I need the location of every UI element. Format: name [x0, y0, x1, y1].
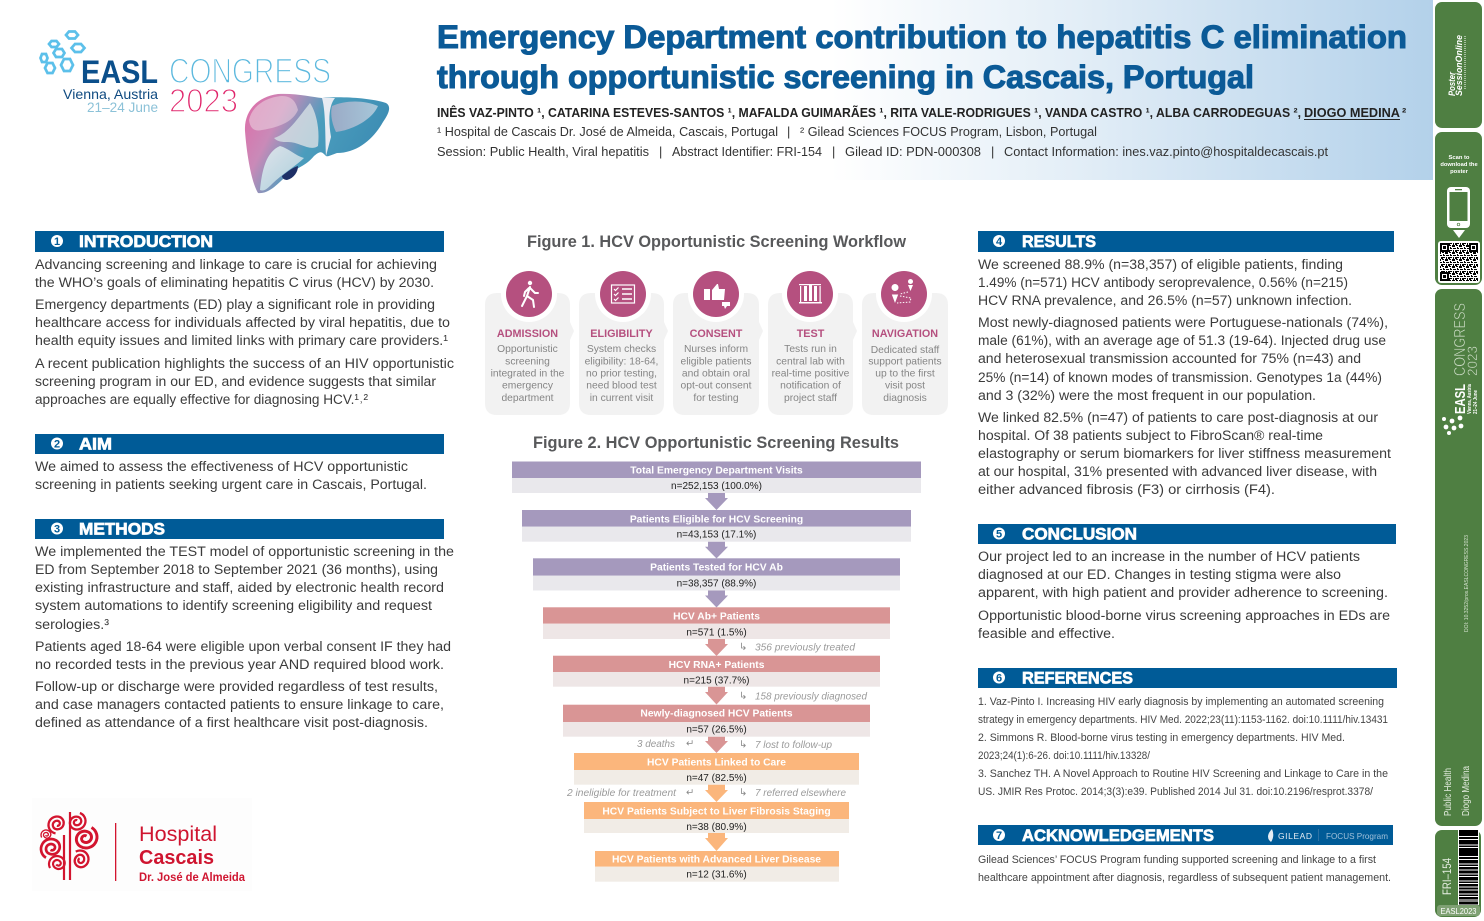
text: introduction body: Emergency departments (ED) play a significant role in providing	[35, 297, 435, 313]
session information: Abstract Identifier: FRI-154	[672, 144, 822, 159]
affiliations: ¹ Hospital de Cascais Dr. José de Almeida, Cascais, Portugal	[437, 124, 778, 139]
EASL wordmark: EASL	[81, 54, 158, 90]
step: admission: ADMISSION	[497, 328, 558, 340]
text: results body: at our hospital, 31% presented with advanced liver disease, with	[978, 464, 1377, 480]
icon: thumbs up	[704, 284, 730, 309]
step: test: Tests run in	[784, 344, 837, 355]
heading: results: RESULTS	[1022, 233, 1096, 251]
text: results body: 25% (n=14) of known modes of transmission. Genotypes 1a (44%)	[978, 370, 1382, 386]
step: test: notification of	[780, 380, 841, 392]
sidebar: topic and presenter: Diogo Medina	[1461, 766, 1472, 816]
session information: Gilead ID: PDN-000308	[845, 144, 981, 159]
authors: ²	[1402, 105, 1406, 120]
arrow: down to QR code	[1453, 230, 1465, 238]
text: introduction body: approaches are equally effective for diagnosing HCV.¹˒²	[35, 392, 368, 408]
session information: |	[659, 144, 662, 159]
hospital wordmark: Dr. José de Almeida	[139, 872, 246, 884]
heading: introduction: 1	[54, 236, 60, 248]
panel: results	[978, 231, 1394, 498]
sidebar: congress hexagons	[1442, 416, 1463, 435]
level: fibrosis staging	[584, 802, 849, 833]
level: tested: Patients Tested for HCV Ab	[650, 562, 783, 574]
dates: 21–24 June	[87, 99, 158, 115]
text: methods body: existing infrastructure and staff, aided by electronic health record	[35, 580, 444, 596]
text: methods body: Patients aged 18-64 were eligible upon verbal consent IF they had	[35, 639, 451, 655]
note: previously treated: 356 previously treated	[755, 642, 855, 654]
text: reference list: US. JMIR Res Protoc. 2014;3(3):e39. Published 2014 Jul 31. doi:10.2196/resprot.3378/	[978, 786, 1373, 798]
authors: DIOGO MEDINA	[1304, 105, 1400, 120]
note: deaths: ↵	[686, 738, 694, 750]
session information: |	[832, 144, 835, 159]
step: admission: screening	[505, 356, 550, 368]
affiliations: ² Gilead Sciences FOCUS Program, Lisbon, Portugal	[800, 124, 1097, 139]
sidebar: scan to download tab	[1435, 132, 1482, 285]
icon: checklist	[612, 285, 634, 303]
text: conclusion body	[978, 549, 1390, 642]
level: linked to care: n=47 (82.5%)	[686, 773, 747, 784]
text: acknowledgements body: Gilead Sciences’ FOCUS Program funding supported screening and linkage to a first	[978, 854, 1376, 866]
level: RNA positive	[553, 656, 880, 687]
level: tested: n=38,357 (88.9%)	[677, 578, 756, 590]
logo: EASL Congress 2023	[40, 32, 331, 119]
text: scan prompt: download the	[1440, 162, 1478, 168]
icon: spiral tree	[37, 811, 101, 880]
text: results body: We screened 88.9% (n=38,357) of eligible patients, finding	[978, 257, 1343, 273]
step: consent: CONSENT	[690, 328, 743, 340]
heading: acknowledgements: ACKNOWLEDGEMENTS	[1022, 827, 1214, 845]
level: Ab positive	[543, 607, 890, 639]
step: eligibility	[579, 266, 668, 415]
text: reference list: 3. Sanchez TH. A Novel Approach to Routine HIV Screening and Linkage to Care in the	[978, 768, 1388, 780]
panel: methods	[35, 519, 454, 731]
sidebar: congress wordmark: 2023	[1465, 346, 1480, 376]
arrow	[705, 833, 728, 851]
barcode	[1458, 830, 1479, 905]
step: navigation: Dedicated staff	[871, 345, 939, 356]
abstract number: FRI–154	[1442, 857, 1454, 895]
text: results body: 1.49% (n=571) HCV antibody seroprevalence, 0.56% (n=215)	[978, 275, 1348, 291]
level: linked to care	[574, 753, 859, 785]
step: eligibility: eligibility: 18-64,	[585, 356, 658, 368]
text: aim body	[35, 459, 427, 493]
text: aim body: screening in patients seeking urgent care in Cascais, Portugal.	[35, 477, 427, 493]
note: previously diagnosed: 158 previously diagnosed	[755, 692, 867, 702]
step: consent	[673, 266, 763, 415]
text: aim body: We aimed to assess the effectiveness of HCV opportunistic	[35, 459, 408, 475]
panel: conclusion	[978, 524, 1396, 642]
wordmark: PosterSessionOnline: SessionOnline	[1454, 34, 1465, 96]
note: referred elsewhere: ↳	[739, 788, 747, 798]
heading: acknowledgements: 7	[996, 830, 1002, 842]
step: test	[768, 266, 857, 415]
step: navigation: support patients	[868, 356, 942, 368]
level: newly diagnosed: Newly-diagnosed HCV Patients	[640, 708, 793, 720]
level: newly diagnosed	[563, 705, 870, 737]
heading: conclusion: CONCLUSION	[1022, 526, 1137, 544]
text: methods body: We implemented the TEST model of opportunistic screening in the	[35, 544, 454, 560]
level: Ab positive: n=571 (1.5%)	[686, 628, 747, 638]
panel: acknowledgements	[978, 825, 1393, 884]
level: total visits: Total Emergency Department Visits	[630, 466, 803, 476]
sidebar: poster session online tab	[1435, 2, 1482, 128]
note: ineligible for treatment: ↵	[686, 788, 694, 798]
note: lost to follow-up: 7 lost to follow-up	[755, 740, 832, 751]
step: test: central lab with	[776, 356, 845, 368]
icon: test tubes	[799, 284, 822, 304]
title: Emergency Department contribution to hepatitis C elimination	[437, 19, 1407, 55]
heading: conclusion: 5	[996, 528, 1002, 540]
level: eligible: Patients Eligible for HCV Screening	[630, 514, 803, 526]
text: results body: and 3 (32%) were the most frequent in our population.	[978, 388, 1316, 404]
text: results body: male (61%), with an average age of 51.3 (19-64). Injected drug use	[978, 333, 1386, 349]
note: previously treated: ↳	[739, 642, 747, 653]
sidebar: congress wordmark	[1452, 303, 1480, 414]
heading: methods: 3	[54, 524, 60, 536]
text: results body	[978, 257, 1391, 498]
affiliations: |	[787, 124, 790, 139]
heading: aim: AIM	[79, 436, 112, 454]
CONGRESS wordmark: CONGRESS	[169, 52, 331, 91]
level: eligible: n=43,153 (17.1%)	[677, 530, 756, 540]
heading: aim	[35, 434, 444, 454]
note: deaths	[637, 738, 694, 750]
text: conclusion body: diagnosed at our ED. Changes in testing stigma were also	[978, 567, 1341, 583]
step: test: TEST	[797, 328, 825, 340]
text: reference list: 1. Vaz-Pinto I. Increasing HIV early diagnosis by implementing an automated screening	[978, 696, 1384, 708]
text: introduction body: screening program in our ED, and evidence suggests that similar	[35, 374, 436, 390]
step: navigation: visit post	[885, 380, 925, 392]
arrow	[705, 542, 728, 558]
level: RNA positive: HCV RNA+ Patients	[669, 660, 765, 671]
heading: references	[978, 668, 1397, 688]
level: fibrosis staging: HCV Patients Subject to Liver Fibrosis Staging	[602, 806, 831, 818]
text: introduction body	[35, 257, 454, 408]
level: advanced liver disease: HCV Patients with Advanced Liver Disease	[612, 854, 821, 866]
step: eligibility: no prior testing,	[586, 368, 657, 380]
heading: introduction: INTRODUCTION	[79, 233, 213, 251]
session information	[437, 144, 1328, 159]
step: eligibility: need blood test	[586, 380, 657, 392]
heading: introduction	[35, 231, 444, 252]
text: scan prompt: Scan to	[1449, 155, 1470, 161]
text: methods body: no recorded tests in the previous year AND required blood work.	[35, 657, 444, 673]
level: linked to care: HCV Patients Linked to Care	[647, 758, 786, 768]
note: ineligible for treatment: 2 ineligible for treatment	[566, 788, 677, 799]
heading: figure 2: Figure 2. HCV Opportunistic Screening Results	[533, 434, 899, 452]
text: introduction body: healthcare access for individuals affected by viral hepatitis, due to	[35, 315, 450, 331]
text: results body: Most newly-diagnosed patients were Portuguese-nationals (74%),	[978, 315, 1388, 331]
hospital wordmark: Hospital	[139, 823, 217, 846]
step: navigation	[862, 266, 948, 415]
heading: methods	[35, 519, 444, 539]
text: results body: hospital. Of 38 patients subject to FibroScan® real-time	[978, 428, 1323, 444]
session information: |	[991, 144, 994, 159]
step: eligibility: in current visit	[590, 393, 653, 404]
arrow	[705, 785, 728, 802]
heading: references: 6	[996, 672, 1002, 684]
panel: introduction	[35, 231, 454, 408]
text: acknowledgements body	[978, 854, 1391, 884]
text: conclusion body: apparent, with high patient and provider adherence to screening.	[978, 585, 1388, 601]
step: admission: integrated in the	[491, 368, 565, 380]
sidebar: abstract tab	[1435, 830, 1481, 917]
level: fibrosis staging: n=38 (80.9%)	[686, 822, 747, 833]
note: lost to follow-up: ↳	[739, 740, 747, 750]
text: reference list: 2. Simmons R. Blood-borne virus testing in emergency departments. HIV Med.	[978, 732, 1345, 744]
step: admission	[485, 266, 574, 415]
arrow	[705, 590, 728, 608]
logo: Gilead FOCUS Program	[1268, 829, 1388, 842]
text: methods body: Follow-up or discharge were provided regardless of test results,	[35, 679, 438, 695]
text: scan prompt	[1440, 155, 1478, 175]
year: 2023	[169, 82, 238, 119]
wordmark: PosterSessionOnline	[1447, 34, 1465, 96]
step: eligibility: System checks	[587, 344, 656, 355]
panel: references	[978, 668, 1397, 798]
sidebar: venue text: 21–24 June	[1473, 390, 1479, 414]
step: navigation: NAVIGATION	[872, 328, 938, 340]
text: introduction body: Advancing screening and linkage to care is crucial for achieving	[35, 257, 437, 273]
step: consent: and obtain oral	[682, 368, 750, 380]
venue: Vienna, Austria	[63, 86, 158, 102]
note: previously diagnosed: ↳	[739, 691, 747, 702]
level: total visits: n=252,153 (100.0%)	[671, 481, 762, 492]
heading: acknowledgements	[978, 825, 1393, 845]
step: admission: Opportunistic	[497, 344, 558, 355]
note: deaths: 3 deaths	[637, 739, 675, 750]
note: referred elsewhere: 7 referred elsewhere	[755, 788, 846, 799]
step: navigation: diagnosis	[883, 393, 927, 404]
text: methods body: system automations to identify screening eligibility and request	[35, 598, 432, 614]
text: results body: HCV RNA prevalence, and 26.5% (n=57) unknown infection.	[978, 293, 1352, 309]
sidebar: DOI: DOI: 10.3252/pros.EASLCONGRESS.2023	[1464, 535, 1470, 632]
level: eligible	[522, 510, 911, 542]
logo: Gilead FOCUS Program: FOCUS Program	[1326, 831, 1388, 841]
session information: Contact Information: ines.vaz.pinto@hospitaldecascais.pt	[1004, 144, 1328, 159]
text: methods body	[35, 544, 454, 731]
text: methods body: ED from September 2018 to September 2021 (36 months), using	[35, 562, 438, 578]
QR code	[1438, 241, 1480, 283]
title: through opportunistic screening in Cascais, Portugal	[437, 59, 1254, 95]
authors: INÊS VAZ-PINTO ¹, CATARINA ESTEVES-SANTOS ¹, MAFALDA GUIMARÃES ¹, RITA VALE-RODRIGUES ¹, VANDA CASTRO ¹, ALBA CARRODEGUAS ²,	[437, 105, 1301, 120]
hospital wordmark	[139, 823, 246, 884]
chart: figure 2 screening funnel	[512, 462, 921, 882]
level: advanced liver disease: n=12 (31.6%)	[686, 870, 747, 880]
sidebar: topic and presenter: Public Health	[1443, 768, 1454, 816]
text: results body: and heterosexual transmission accounted for 75% (n=43) and	[978, 351, 1361, 367]
text: acknowledgements body: healthcare appointment after diagnosis, regardless of subsequent patient management.	[978, 872, 1391, 884]
sidebar: congress tab	[1435, 289, 1482, 826]
step: consent: eligible patients	[681, 356, 751, 368]
step: navigation: up to the first	[875, 368, 935, 380]
step: consent: Nurses inform	[684, 344, 748, 355]
illustration: liver	[245, 94, 389, 193]
heading: results: 4	[996, 236, 1003, 248]
logo: Gilead FOCUS Program: GILEAD	[1278, 831, 1312, 841]
text: results body: either advanced fibrosis (F3) or cirrhosis (F4).	[978, 482, 1275, 498]
level: newly diagnosed: n=57 (26.5%)	[686, 724, 747, 736]
panel: aim	[35, 434, 444, 493]
step: consent: opt-out consent	[681, 380, 752, 392]
title	[437, 19, 1407, 95]
icon: phone	[1447, 187, 1470, 228]
heading: results	[978, 231, 1394, 252]
text: scan prompt: poster	[1450, 169, 1469, 175]
sidebar: congress wordmark: CONGRESS	[1452, 303, 1469, 376]
level: total visits	[512, 462, 921, 493]
header gradient band	[0, 0, 1433, 180]
text: conclusion body: feasible and effective.	[978, 626, 1115, 642]
panel: figure 1 workflow	[485, 266, 948, 415]
step: admission: emergency	[502, 380, 554, 392]
icon: walking person	[522, 281, 538, 307]
text: methods body: serologies.³	[35, 617, 109, 633]
text: methods body: and case managers contacted patients to ensure linkage to care,	[35, 697, 444, 713]
step: consent: for testing	[693, 393, 739, 404]
step: test: real-time positive	[772, 368, 850, 380]
arrow	[705, 493, 728, 510]
wordmark: PosterSessionOnline: Poster	[1447, 71, 1458, 96]
sidebar: venue text	[1467, 383, 1479, 414]
heading: methods: METHODS	[79, 520, 165, 538]
sidebar: congress wordmark: EASL	[1452, 384, 1469, 414]
logo: Hospital de Cascais	[32, 798, 252, 891]
text: introduction body: the WHO’s goals of eliminating hepatitis C virus (HCV) by 2030.	[35, 275, 434, 291]
text: reference list: 2023;24(1):6-26. doi:10.1111/hiv.13328/	[978, 750, 1150, 762]
step: admission: department	[501, 393, 554, 404]
step: eligibility: ELIGIBILITY	[590, 328, 653, 340]
heading: figure 1: Figure 1. HCV Opportunistic Screening Workflow	[527, 233, 906, 251]
arrow	[705, 639, 728, 656]
text: conclusion body: Our project led to an increase in the number of HCV patients	[978, 549, 1360, 565]
heading: conclusion	[978, 524, 1396, 544]
event tag: EASL2023	[1440, 907, 1477, 916]
text: reference list	[978, 696, 1388, 798]
heading: references: REFERENCES	[1022, 670, 1133, 688]
affiliations	[437, 124, 1097, 139]
arrow	[705, 687, 728, 704]
hospital wordmark: Cascais	[139, 847, 214, 869]
session information: Session: Public Health, Viral hepatitis	[437, 144, 649, 159]
sidebar: venue text: Vienna, Austria	[1467, 383, 1473, 414]
level: RNA positive: n=215 (37.7%)	[684, 676, 749, 686]
step: test: project staff	[784, 393, 837, 404]
text: reference list: strategy in emergency departments. HIV Med. 2022;23(11):1153-1162. doi:10.1111/hiv.13431	[978, 714, 1388, 726]
arrow	[705, 737, 728, 753]
text: introduction body: health equity issues and limited links with primary care providers.¹	[35, 333, 448, 349]
heading: aim: 2	[54, 438, 60, 450]
level: tested	[533, 558, 900, 590]
text: methods body: defined as attendance of a first healthcare visit post-diagnosis.	[35, 715, 428, 731]
text: conclusion body: Opportunistic blood-borne virus screening approaches in EDs are	[978, 608, 1390, 624]
text: introduction body: A recent publication highlights the success of an HIV opportunistic	[35, 356, 454, 372]
sidebar: topic and presenter	[1443, 766, 1472, 816]
level: Ab positive: HCV Ab+ Patients	[673, 612, 760, 622]
icon: map pins	[892, 279, 913, 303]
text: results body: We linked 82.5% (n=47) of patients to care post-diagnosis at our	[978, 410, 1378, 426]
level: advanced liver disease	[595, 851, 839, 882]
icon: EASL hexagons	[40, 32, 84, 73]
text: results body: elastography or serum biomarkers for liver stiffness measurement	[978, 446, 1391, 462]
